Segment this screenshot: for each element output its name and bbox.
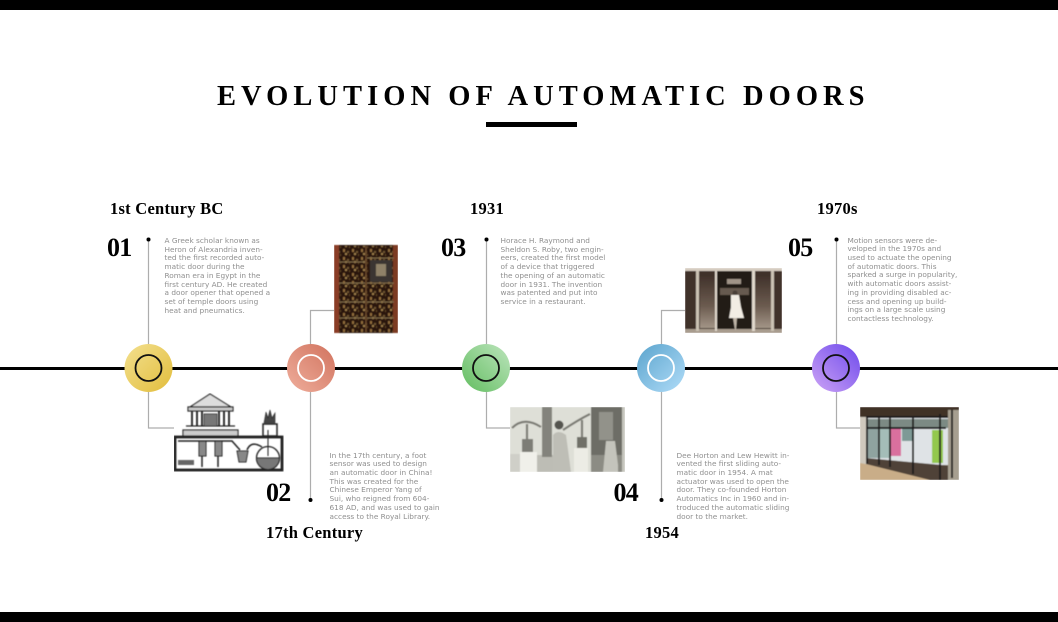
timeline nodes	[124, 344, 860, 392]
event 04 number: 04	[614, 478, 638, 506]
event 02 text: In the 17th century, a foot sensor was used to design an automatic door in China! This was created for the Chinese Emperor Yang of Sui, who reigned from 604- 618 AD, and was used to gain access to the Royal Library.	[330, 450, 440, 521]
event 04 heading: 1954	[645, 523, 679, 542]
image: modern glass entrance	[860, 407, 959, 480]
image: 1931 restaurant doorway	[510, 407, 625, 472]
title: EVOLUTION OF AUTOMATIC DOORS	[217, 80, 870, 112]
top black band	[0, 0, 1058, 10]
image: woman walking through sliding doors	[685, 268, 782, 333]
timeline axis	[0, 366, 1058, 370]
image: carved temple door	[334, 244, 398, 334]
event 01 heading: 1st Century BC	[110, 198, 224, 218]
event 01 text: A Greek scholar known as Heron of Alexandria inven- ted the first recorded auto- matic door during the Roman era in Egypt in the first century AD. He created a door opener that opened a set of temple doors using heat and pneumatics.	[164, 236, 270, 315]
event 02 number: 02	[266, 478, 291, 506]
event 03 heading: 1931	[470, 198, 504, 218]
connector lines	[146, 238, 860, 502]
event 01 number: 01	[107, 233, 132, 262]
title underline	[486, 122, 577, 127]
event 05 number: 05	[788, 233, 813, 262]
event 05 text: Motion sensors were de- veloped in the 1970s and used to actuate the opening of automatic doors. This sparked a surge in popularity, with automatic doors assist- ing in providing disabled ac- cess and opening up build- ings on a large scale using contactless technology.	[848, 236, 957, 323]
event 04 text: Dee Horton and Lew Hewitt in- vented the first sliding auto- matic door in 1954. A mat actuator was used to open the door. They co-founded Horton Automatics Inc in 1960 and in- troduced the automatic sliding door to the market.	[676, 450, 789, 521]
event 03 text: Horace H. Raymond and Sheldon S. Roby, two engin- eers, created the first model of a device that triggered the opening of an automatic door in 1931. The invention was patented and put into service in a restaurant.	[500, 236, 605, 306]
event 02 heading: 17th Century	[266, 523, 363, 542]
event 03 number: 03	[441, 233, 466, 262]
image: Heron temple door mechanism	[174, 393, 284, 472]
bottom black band	[0, 612, 1058, 622]
event 05 heading: 1970s	[817, 198, 858, 218]
